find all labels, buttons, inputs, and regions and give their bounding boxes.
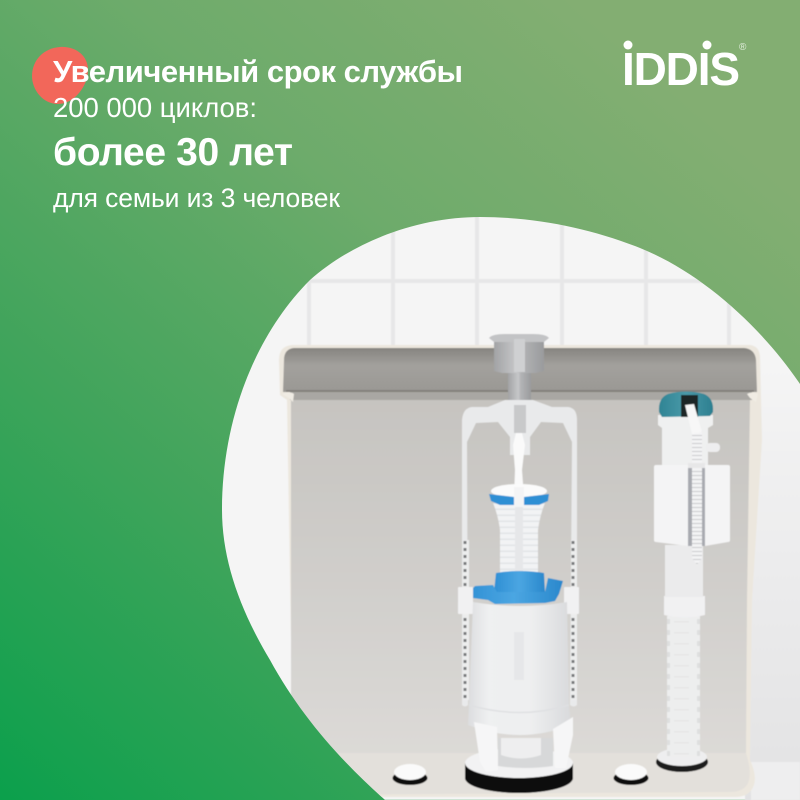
logo: IDDIS <box>622 40 747 95</box>
logo wordmark: IDDIS <box>622 43 740 95</box>
base opening window <box>498 748 554 768</box>
decorative coral blob <box>32 47 88 104</box>
heading: extended service life: Увеличенный срок службы <box>53 54 463 89</box>
lower right panel edge <box>751 762 800 800</box>
embossed marks <box>514 632 524 680</box>
flush valve <box>458 334 579 793</box>
float lever <box>685 404 702 434</box>
rim shelf <box>290 391 752 400</box>
rod clip at ring <box>513 497 525 507</box>
left plug <box>392 764 428 785</box>
push button housing <box>489 334 549 403</box>
right rack teeth <box>571 540 575 698</box>
right clip leg <box>552 717 574 757</box>
photo: cistern cross-section in rounded mask <box>200 200 800 800</box>
ribbed tube <box>667 616 700 756</box>
black gasket <box>465 763 573 793</box>
tube base <box>657 748 707 766</box>
logo dots <box>624 40 712 50</box>
bellows <box>493 503 545 580</box>
text: family of three: для семьи из 3 человек <box>53 183 340 213</box>
left guide tab <box>458 587 473 614</box>
cylinder body <box>468 602 571 735</box>
bellows centre spine <box>516 508 522 571</box>
rod clamp <box>688 463 705 468</box>
valve body <box>658 415 713 468</box>
blue flange <box>465 578 563 604</box>
tube base gasket <box>656 752 708 772</box>
right guide tab <box>564 587 579 614</box>
cistern upper inner rim <box>283 348 757 392</box>
blue collar <box>494 571 545 592</box>
chain link <box>513 433 525 484</box>
float body <box>654 465 730 546</box>
frame slot <box>514 405 526 433</box>
cylinder step <box>482 708 540 713</box>
upper blue ring <box>489 494 549 505</box>
text: more than 30 years: более 30 лет <box>53 131 293 174</box>
threaded rod <box>692 430 702 565</box>
right wall surface <box>745 360 800 800</box>
cistern shell <box>279 345 762 797</box>
tube collar <box>664 596 705 618</box>
text: number of cycles: 200 000 циклов: <box>53 92 257 123</box>
side nozzle <box>706 443 720 452</box>
right rim lip <box>746 392 753 400</box>
rim shelf line <box>286 390 754 392</box>
cistern back wall <box>291 398 750 755</box>
float centre channel <box>688 468 705 546</box>
registered mark: ® <box>739 42 747 53</box>
bellows top cap <box>491 484 547 498</box>
cap notch <box>681 395 698 417</box>
cistern floor <box>340 756 748 794</box>
left clip leg <box>474 722 498 754</box>
teal cap <box>659 392 713 417</box>
text block: headline <box>53 54 463 213</box>
fill valve <box>654 392 730 772</box>
left rack teeth <box>463 540 469 700</box>
tiled wall <box>200 200 800 800</box>
overflow frame <box>462 400 577 706</box>
left rim lip <box>289 392 294 402</box>
inner drain cylinder <box>501 738 541 758</box>
white base ring <box>465 748 573 778</box>
upper tube <box>665 545 703 597</box>
right plug <box>614 764 648 785</box>
